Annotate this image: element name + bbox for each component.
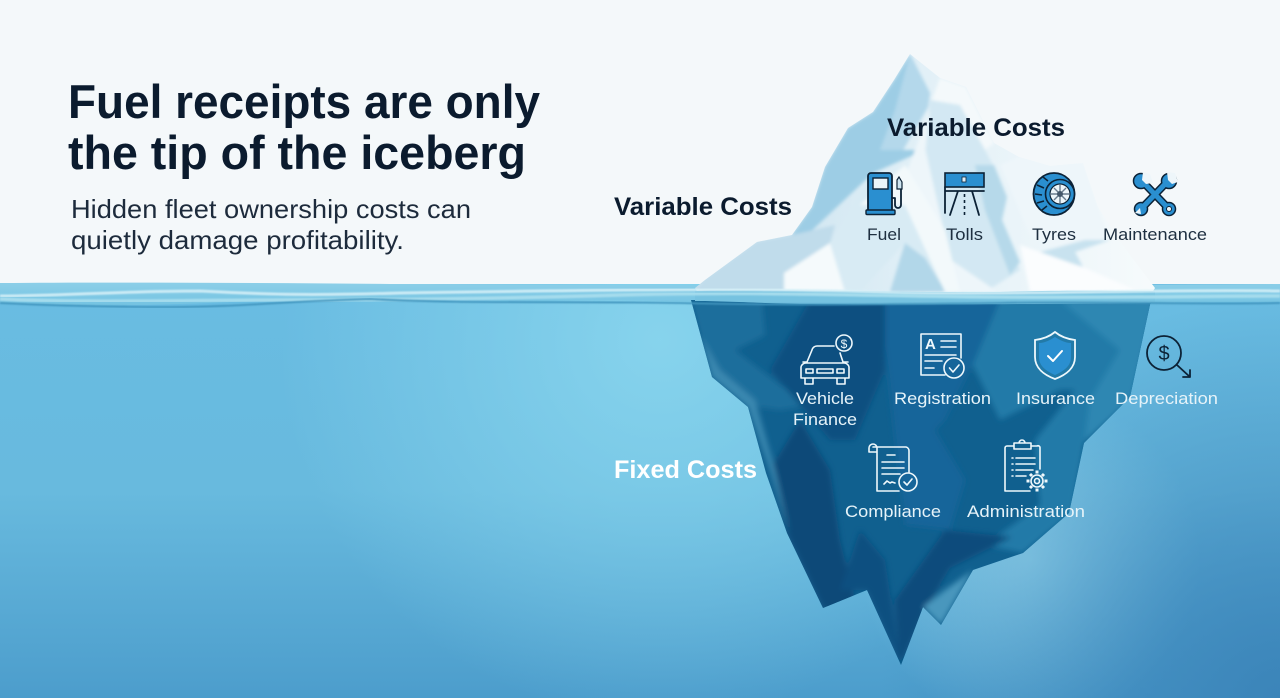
label: registration: Registration [894,389,991,408]
label: administration: Administration [967,502,1085,521]
label: tolls: Tolls [946,225,983,244]
label: vehicle finance [793,389,857,429]
subtitle: Hidden fleet ownership costs can [71,194,471,224]
sky background [0,0,1280,290]
subtitle: quietly damage profitability. [71,225,404,255]
icon: registration form: A [925,336,936,353]
label: vehicle finance: Vehicle [796,389,854,408]
icon: crossed wrenches [1134,172,1178,216]
icon: shield [1035,332,1075,379]
heading: fixed costs: Fixed Costs [614,456,757,484]
subtitle [71,194,471,255]
item: maintenance [1103,172,1207,244]
icon: document with check [869,444,917,491]
item: fuel [866,173,902,244]
item: vehicle finance [793,335,857,429]
item: insurance [1016,332,1095,408]
label: insurance: Insurance [1016,389,1095,408]
icon: toll gate [945,173,984,215]
label: depreciation: Depreciation [1115,389,1218,408]
label: maintenance: Maintenance [1103,225,1207,244]
item: depreciation [1115,336,1218,408]
label: tyres: Tyres [1032,225,1076,244]
item: compliance [845,444,941,521]
title [68,75,540,179]
water background [0,284,1280,698]
title: the tip of the iceberg [68,126,526,179]
label: fuel: Fuel [867,225,901,244]
iceberg below water [685,295,1160,670]
item: administration [967,440,1085,521]
item: registration [894,334,991,408]
heading: variable costs on iceberg: Variable Costs [887,114,1065,142]
water surface streaks [0,290,1280,307]
icon: falling dollar magnifier: $ [1158,343,1170,365]
icon: fuel pump [866,173,902,214]
item: tyres [1032,173,1076,244]
icon: car with dollar: $ [841,337,848,351]
icon: clipboard with gear [1005,440,1048,492]
heading: variable costs left: Variable Costs [614,193,792,221]
iceberg above water [690,50,1160,300]
label: vehicle finance: Finance [793,410,857,429]
title: Fuel receipts are only [68,75,540,128]
icon: tyre [1034,173,1074,215]
label: compliance: Compliance [845,502,941,521]
water surface band [0,283,1280,305]
item: tolls [945,173,984,244]
